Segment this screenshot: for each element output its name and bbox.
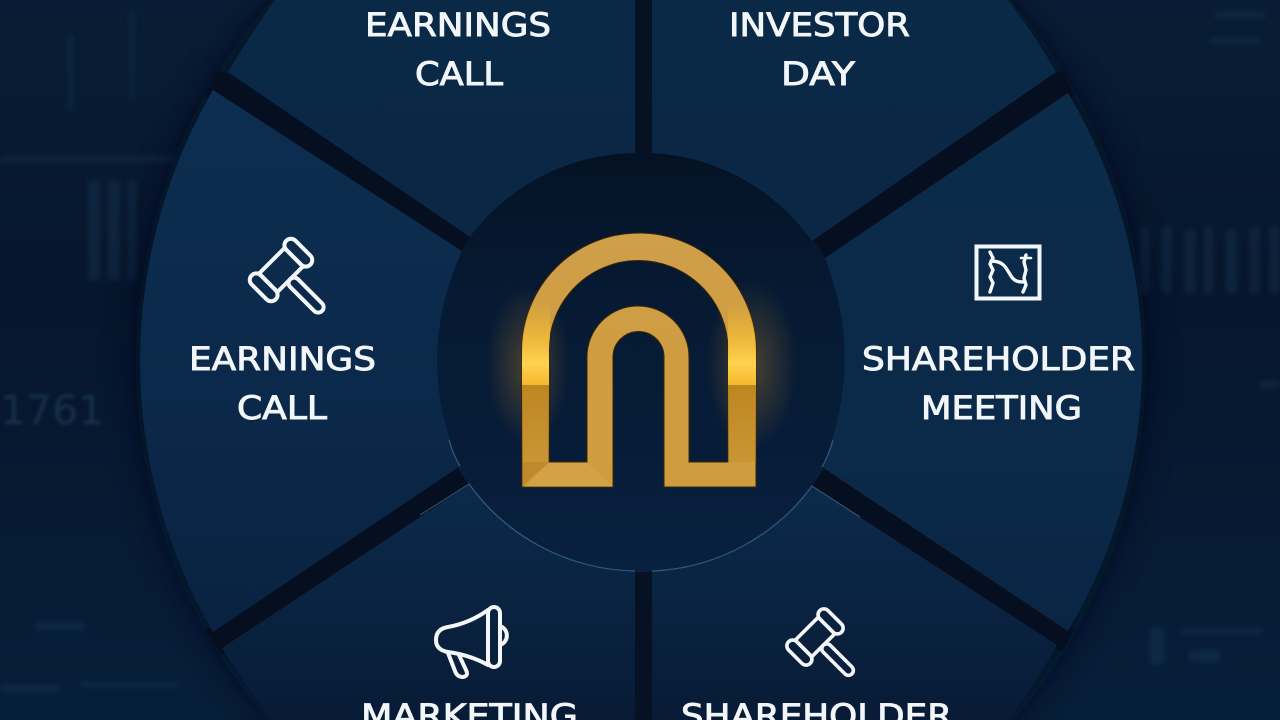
label: investor day — [729, 6, 910, 93]
segment: bottom left — [222, 484, 635, 720]
label: earnings call left: EARNINGS — [189, 340, 376, 378]
wheel shadow and gaps — [136, 0, 1146, 720]
label: earnings call top — [365, 6, 551, 93]
faint background number: 1761 — [0, 388, 104, 434]
centre hub base — [429, 152, 853, 572]
icon: megaphone — [436, 607, 507, 677]
segment: left — [140, 90, 462, 632]
icon: gavel bottom — [784, 606, 872, 694]
segment: bottom right — [652, 486, 1057, 720]
segment: right — [822, 93, 1142, 631]
gold logo — [486, 233, 798, 487]
label: earnings call top: EARNINGS — [365, 6, 551, 44]
label: earnings call top: CALL — [415, 55, 503, 93]
icon: chart — [976, 246, 1040, 298]
label: earnings call left — [189, 340, 376, 427]
icon: gavel left — [247, 236, 344, 333]
segment: top left — [228, 0, 635, 237]
label: shareholder meeting right — [862, 340, 1135, 427]
label: shareholder meeting right: SHAREHOLDER — [862, 340, 1135, 378]
label: earnings call left: CALL — [237, 389, 327, 427]
label: shareholder meeting right: MEETING — [921, 389, 1082, 427]
label: investor day: DAY — [781, 55, 856, 93]
segment: top right — [652, 0, 1056, 241]
label: investor day: INVESTOR — [729, 6, 910, 44]
hub edge highlights — [420, 440, 860, 571]
